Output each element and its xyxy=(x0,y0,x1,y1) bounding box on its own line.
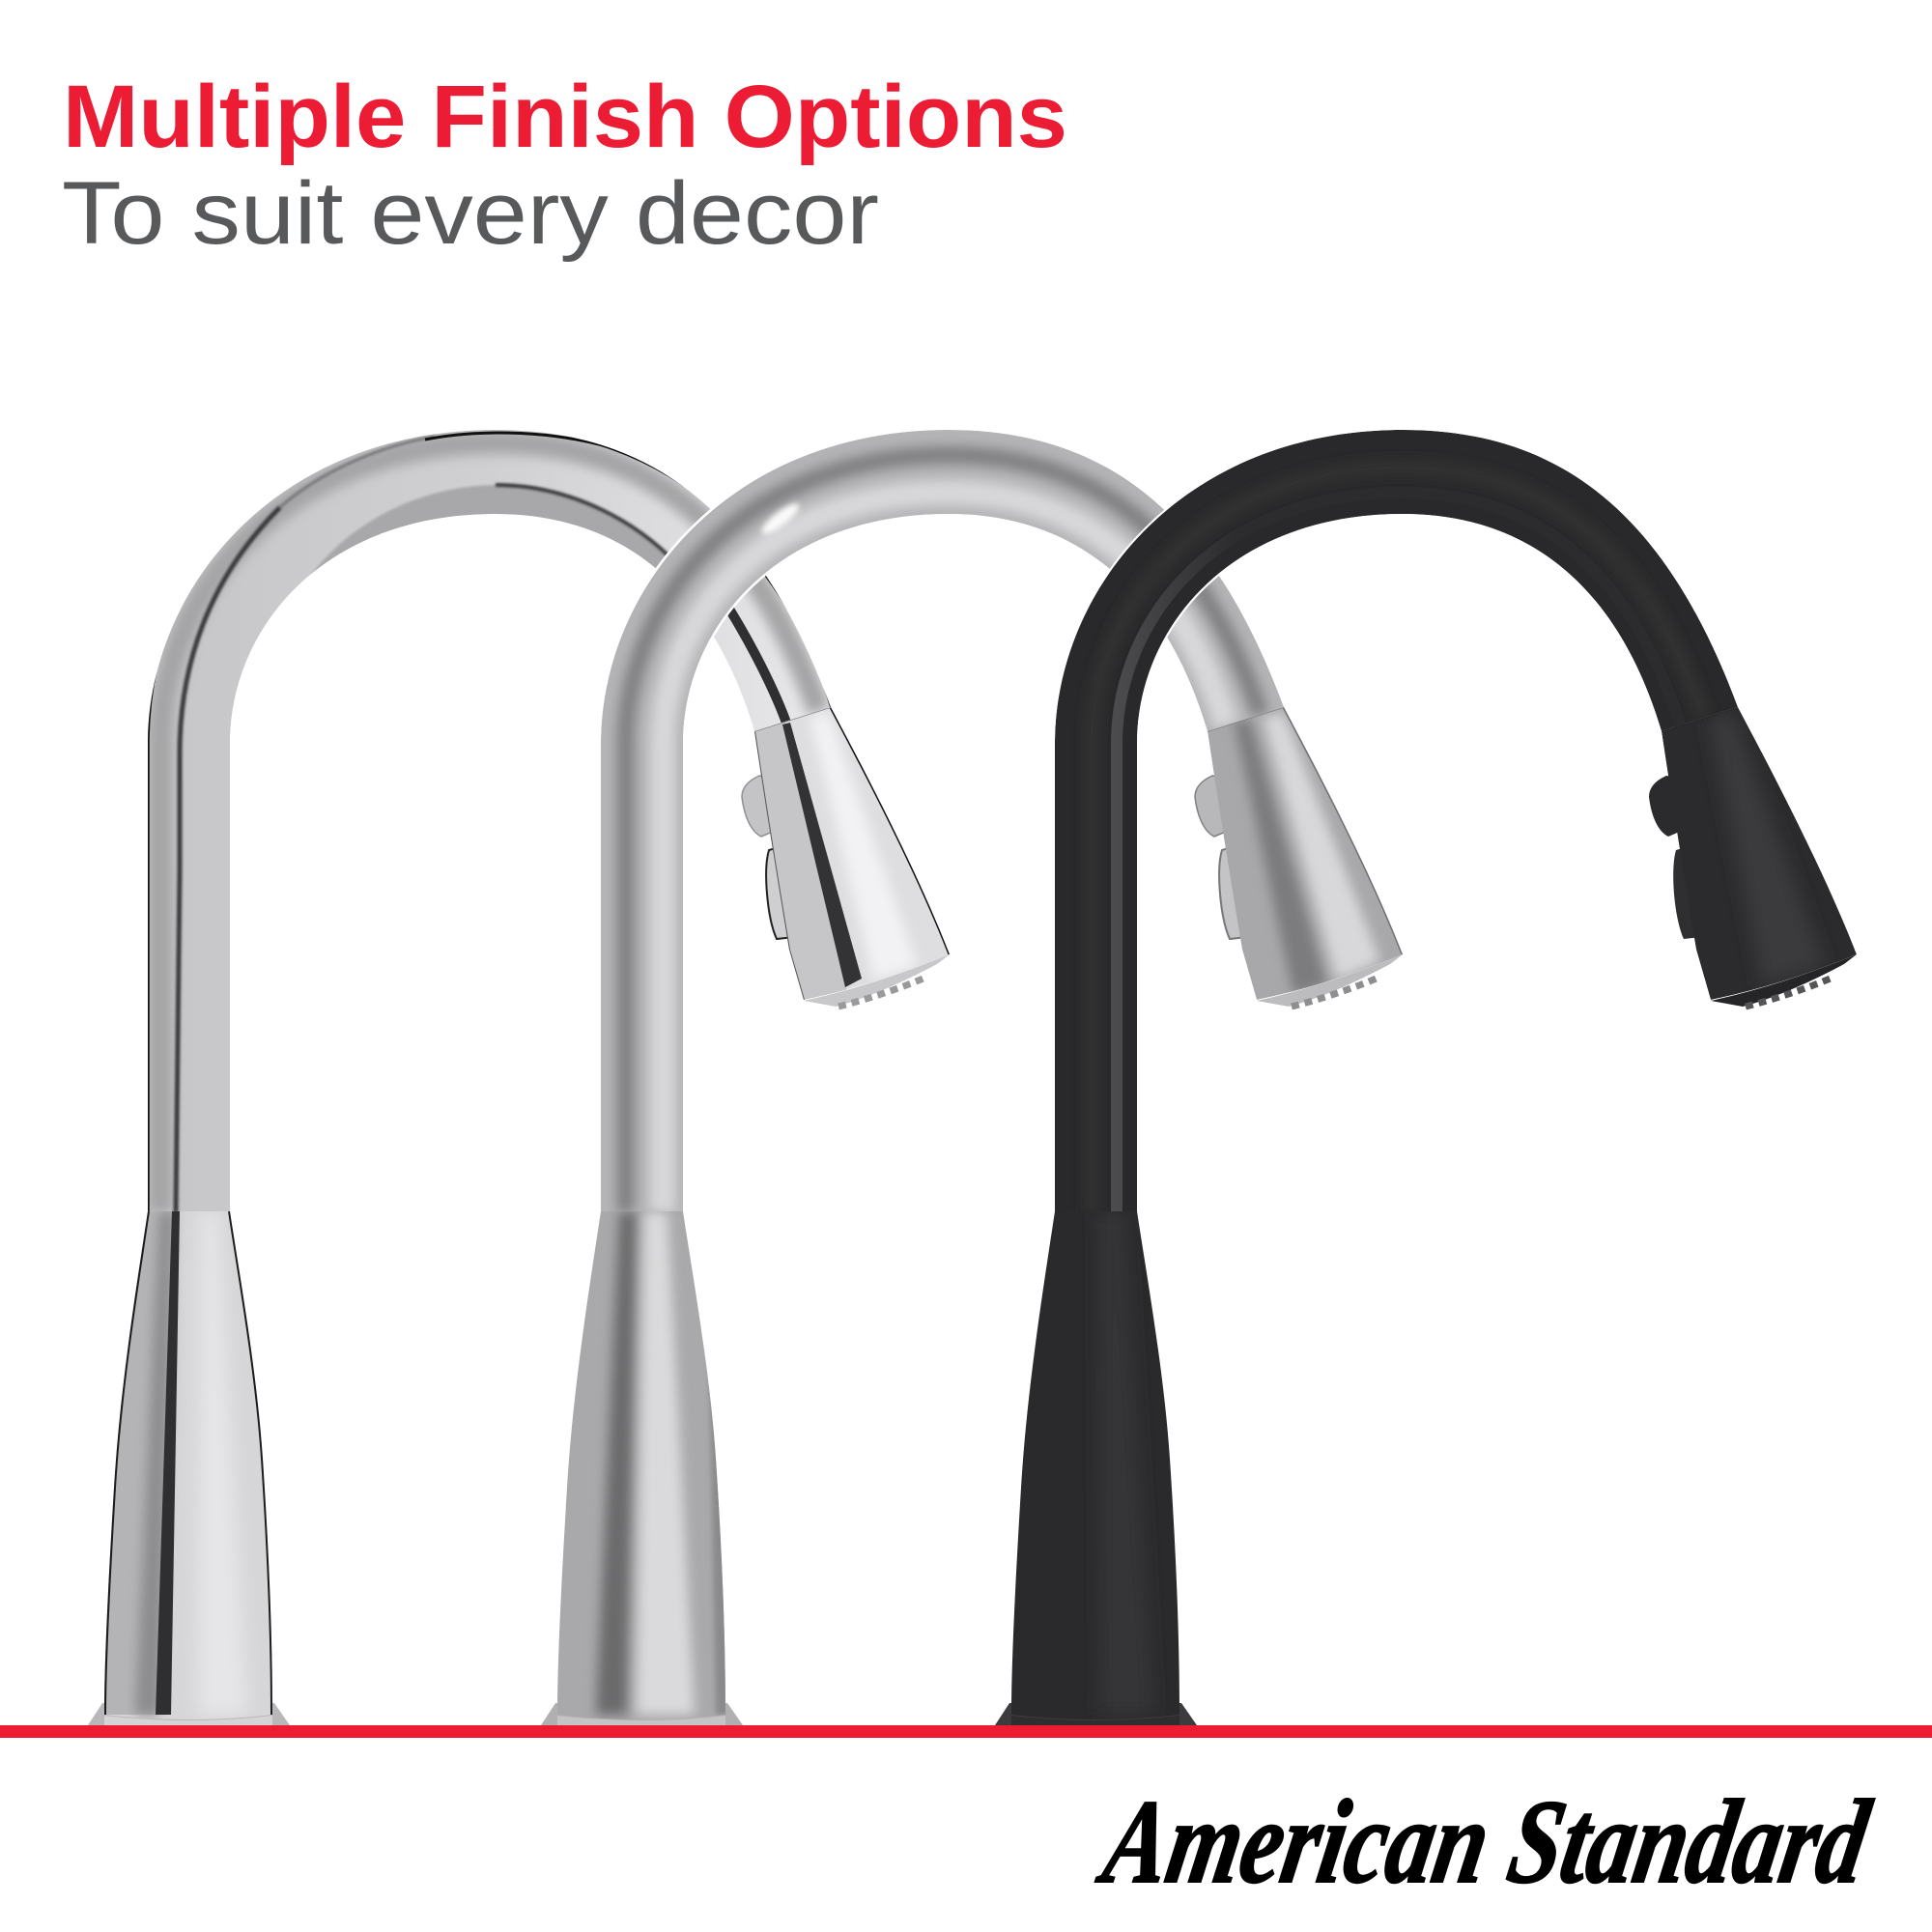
black spray head xyxy=(1662,707,1857,1000)
black faucet arched tube xyxy=(1055,430,1738,1212)
chrome faucet arched tube xyxy=(148,430,831,1212)
chrome spray head xyxy=(749,707,950,1005)
black faucet base cone xyxy=(1004,1208,1187,1719)
chrome spray face and nozzles xyxy=(804,954,950,1007)
subheading: to suit every decor: To suit every decor xyxy=(62,164,879,263)
chrome faucet base cone xyxy=(97,1208,280,1719)
stainless spray head xyxy=(1208,707,1403,1000)
faucet: polished chrome xyxy=(88,430,950,1725)
black spray face and nozzles xyxy=(1711,954,1857,1007)
stainless spray button and lever xyxy=(1195,776,1247,939)
heading: multiple finish options: Multiple Finish Options xyxy=(63,68,1067,166)
stainless faucet base cone xyxy=(557,1211,725,1719)
faucet: brushed stainless xyxy=(541,430,1403,1725)
red baseline bar xyxy=(0,1725,1932,1738)
chrome spray button and lever xyxy=(742,776,794,939)
stainless faucet arched tube xyxy=(601,430,1284,1212)
black spray button and lever xyxy=(1649,776,1701,939)
stainless spray face and nozzles xyxy=(1257,954,1403,1007)
faucet: matte black xyxy=(995,430,1857,1725)
